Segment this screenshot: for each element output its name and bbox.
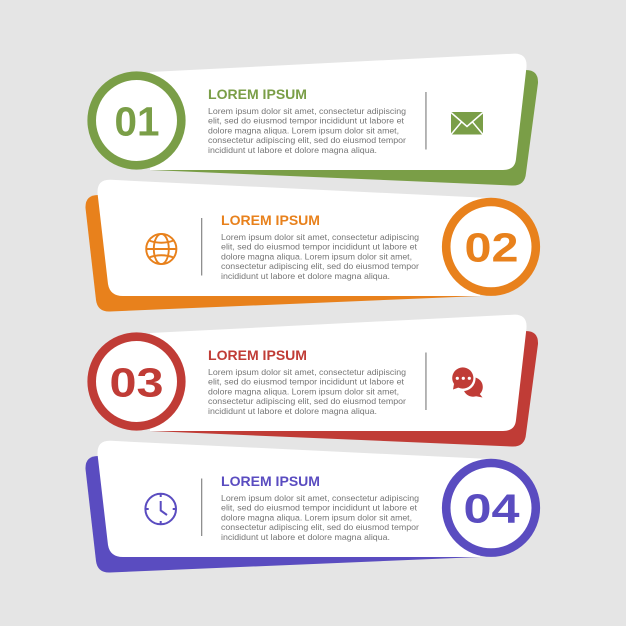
- panel 02 back shape: [85, 195, 480, 312]
- body text 03: elit, sed do eiusmod tempor incididunt ut labore et: [208, 376, 405, 386]
- heading 01: LOREM IPSUM: [208, 86, 307, 102]
- heading 03: LOREM IPSUM: [208, 347, 307, 363]
- body text 02: incididunt ut labore et dolore magna aliqua.: [221, 271, 390, 281]
- icon: chat bubbles: [450, 366, 483, 398]
- panel: step 02: [85, 180, 536, 312]
- body text 03: Lorem ipsum dolor sit amet, consectetur adipiscing: [208, 367, 406, 377]
- number badge 03: [92, 337, 181, 426]
- body text 04: Lorem ipsum dolor sit amet, consectetur adipiscing: [221, 493, 419, 503]
- body text 04: dolore magna aliqua. Lorem ipsum dolor sit amet,: [221, 512, 412, 522]
- number badge 02: 02: [464, 224, 518, 270]
- number badge 01: [92, 76, 181, 165]
- body text 03: consectetur adipiscing elit, sed do eiusmod tempor: [208, 396, 406, 406]
- number badge 04: [446, 463, 536, 553]
- body text 01: elit, sed do eiusmod tempor incididunt ut labore et: [208, 116, 405, 126]
- number badge 02: [446, 202, 536, 292]
- body text 01: dolore magna aliqua. Lorem ipsum dolor sit amet,: [208, 125, 399, 135]
- panel 04 back shape: [85, 456, 480, 573]
- body text 01: Lorem ipsum dolor sit amet, consectetur adipiscing: [208, 106, 406, 116]
- body text 04: incididunt ut labore et dolore magna aliqua.: [221, 532, 390, 542]
- panel 03 white card: [150, 315, 527, 431]
- panel 01 back shape: [150, 70, 538, 186]
- panel: step 01: [92, 54, 538, 186]
- body text 02: elit, sed do eiusmod tempor incididunt ut labore et: [221, 242, 418, 252]
- number badge 04: 04: [464, 486, 520, 532]
- body text 01: [208, 106, 406, 155]
- number badge 03: 03: [110, 360, 164, 406]
- body text 02: Lorem ipsum dolor sit amet, consectetur adipiscing: [221, 232, 419, 242]
- body text 01: incididunt ut labore et dolore magna aliqua.: [208, 145, 377, 155]
- panel 02 white card: [97, 180, 490, 296]
- icon: envelope: [451, 112, 483, 134]
- panel: step 03: [92, 315, 538, 447]
- body text 04: consectetur adipiscing elit, sed do eiusmod tempor: [221, 522, 419, 532]
- body text 03: incididunt ut labore et dolore magna aliqua.: [208, 406, 377, 416]
- body text 01: consectetur adipiscing elit, sed do eiusmod tempor: [208, 135, 406, 145]
- heading 04: LOREM IPSUM: [221, 473, 320, 489]
- body text 02: [221, 232, 419, 281]
- body text 04: [221, 493, 419, 542]
- body text 03: [208, 367, 406, 416]
- panel 04 white card: [97, 441, 490, 557]
- icon: clock: [145, 494, 176, 524]
- body text 03: dolore magna aliqua. Lorem ipsum dolor sit amet,: [208, 386, 399, 396]
- icon: globe: [146, 234, 176, 264]
- panel 03 back shape: [150, 331, 538, 447]
- body text 04: elit, sed do eiusmod tempor incididunt ut labore et: [221, 502, 418, 512]
- panel: step 04: [85, 441, 536, 573]
- heading 02: LOREM IPSUM: [221, 212, 320, 228]
- body text 02: consectetur adipiscing elit, sed do eiusmod tempor: [221, 261, 419, 271]
- body text 02: dolore magna aliqua. Lorem ipsum dolor sit amet,: [221, 251, 412, 261]
- number badge 01: 01: [114, 98, 160, 144]
- panel 01 white card: [150, 54, 527, 170]
